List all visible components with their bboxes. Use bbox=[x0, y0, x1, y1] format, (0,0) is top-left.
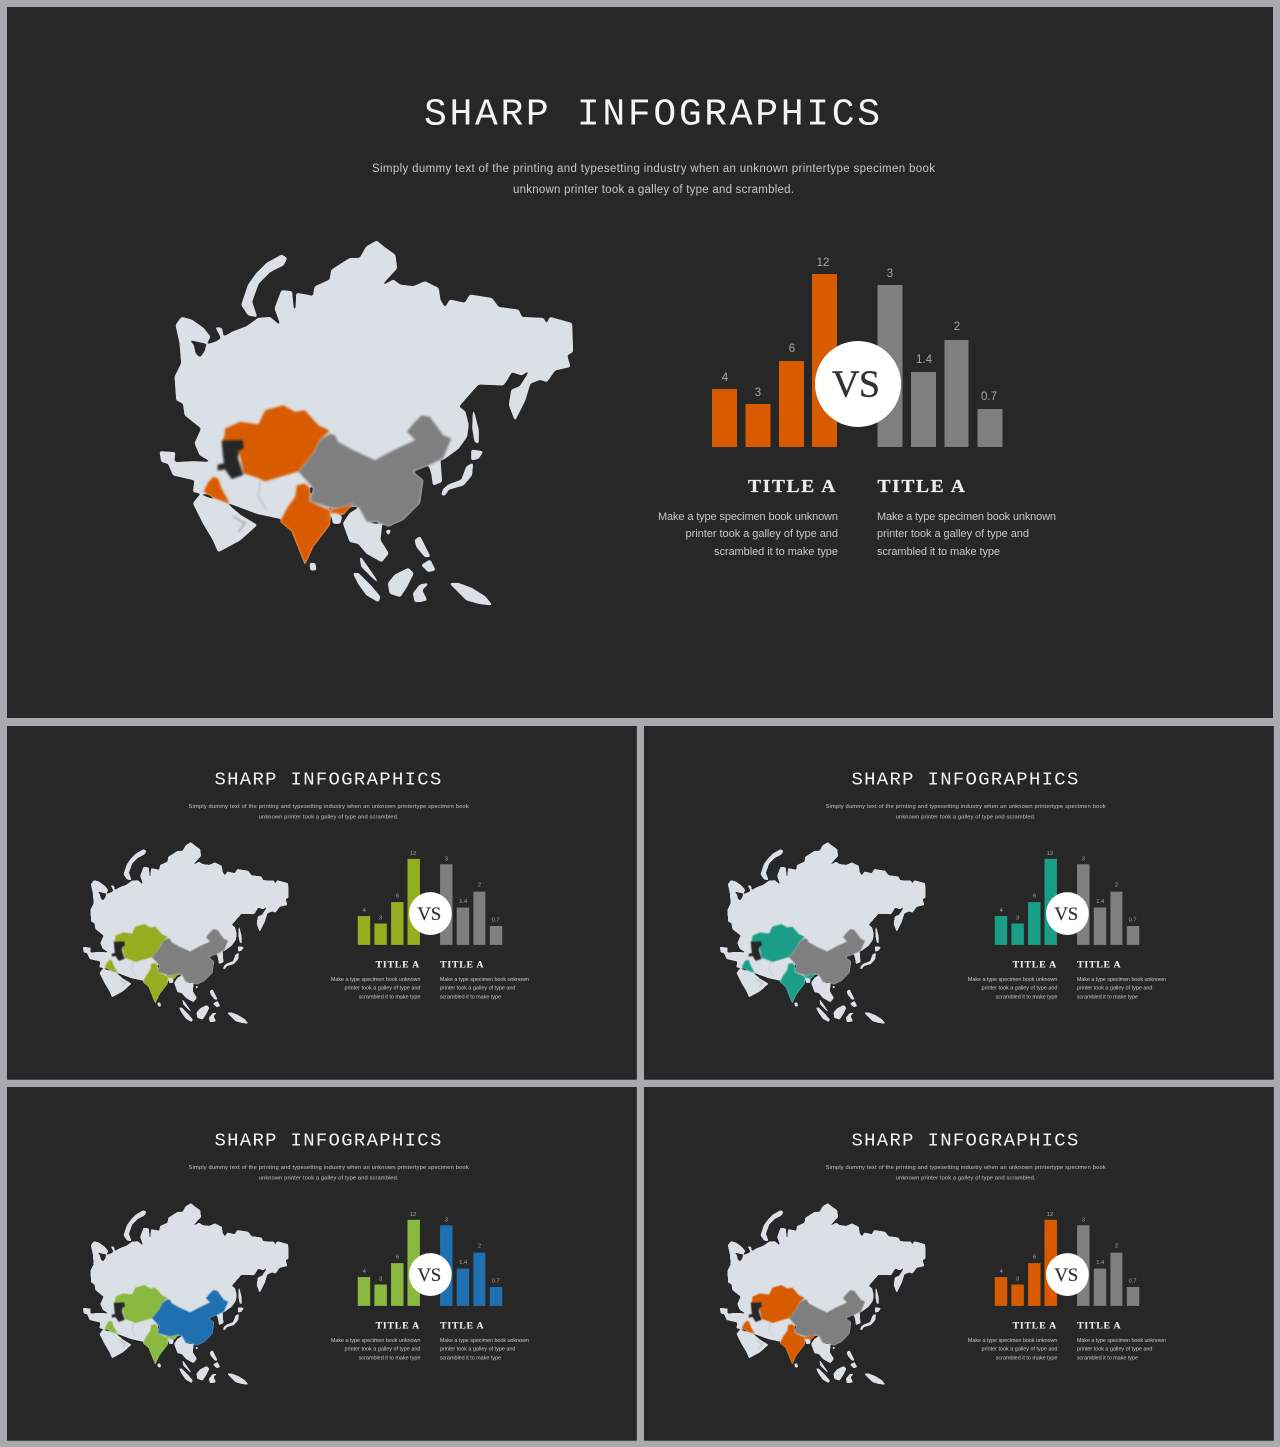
bar value labels bbox=[363, 851, 500, 924]
VS badge: VS bbox=[832, 364, 880, 406]
VS badge: VS bbox=[417, 904, 441, 925]
subtitle text: unknown printer took a galley of type and scrambled. bbox=[513, 184, 794, 196]
bar chart: left series bbox=[712, 274, 837, 447]
VS badge: VS bbox=[1054, 904, 1078, 925]
bar chart: left series bbox=[995, 1220, 1057, 1306]
bar value labels: 0.7 bbox=[492, 918, 500, 924]
left column heading: TITLE A bbox=[1013, 1320, 1057, 1330]
bar value labels: 2 bbox=[478, 883, 481, 889]
title: SHARP INFOGRAPHICS bbox=[214, 768, 441, 790]
subtitle text bbox=[189, 804, 469, 821]
bar value labels: 3 bbox=[445, 1217, 448, 1223]
panel: main slide orange bbox=[7, 7, 1273, 718]
bar value labels: 6 bbox=[1033, 1255, 1036, 1261]
VS badge bbox=[1046, 892, 1089, 935]
left column heading: TITLE A bbox=[1013, 959, 1057, 969]
right column text: scrambled it to make type bbox=[1077, 995, 1138, 1001]
bar chart: left series bbox=[358, 1220, 420, 1306]
VS badge: VS bbox=[417, 1265, 441, 1286]
bar chart: left series bbox=[995, 859, 1057, 945]
left column text: Make a type specimen book unknown bbox=[968, 1338, 1057, 1344]
VS badge bbox=[815, 341, 901, 427]
subtitle text bbox=[189, 1165, 469, 1182]
left column text: scrambled it to make type bbox=[359, 995, 420, 1001]
bar value labels: 3 bbox=[1082, 856, 1085, 862]
right column heading: TITLE A bbox=[440, 1320, 484, 1330]
bar chart: right series bbox=[878, 285, 1002, 447]
bar value labels: 3 bbox=[1016, 1277, 1019, 1283]
left column text bbox=[331, 977, 420, 1001]
left column text: printer took a galley of type and bbox=[982, 986, 1057, 992]
subtitle text: Simply dummy text of the printing and typesetting industry when an unknown printertype specimen book bbox=[189, 804, 469, 810]
bar chart: right series bbox=[440, 1225, 502, 1306]
subtitle text: Simply dummy text of the printing and typesetting industry when an unknown printertype specimen book bbox=[826, 804, 1106, 810]
map of Asia bbox=[83, 842, 288, 1024]
right column text: Make a type specimen book unknown bbox=[1077, 1338, 1166, 1344]
bar value labels: 4 bbox=[1000, 908, 1004, 914]
left column text: scrambled it to make type bbox=[714, 546, 838, 558]
bar value labels: 1.4 bbox=[916, 354, 933, 366]
left column text: Make a type specimen book unknown bbox=[968, 977, 1057, 983]
bar value labels: 6 bbox=[789, 343, 795, 355]
bar value labels: 4 bbox=[363, 1269, 367, 1275]
bar chart: left series bbox=[358, 859, 420, 945]
left column text bbox=[968, 1338, 1057, 1362]
VS badge bbox=[409, 1253, 452, 1296]
left column text bbox=[968, 977, 1057, 1001]
left column text: scrambled it to make type bbox=[996, 995, 1057, 1001]
bar value labels: 4 bbox=[722, 372, 729, 384]
bar value labels bbox=[1000, 851, 1137, 924]
right column text: Make a type specimen book unknown bbox=[877, 511, 1056, 523]
title: SHARP INFOGRAPHICS bbox=[851, 768, 1078, 790]
subtitle text bbox=[826, 1165, 1106, 1182]
bar value labels: 0.7 bbox=[1129, 918, 1137, 924]
VS badge bbox=[1046, 1253, 1089, 1296]
right column heading: TITLE A bbox=[1077, 1320, 1121, 1330]
bar value labels: 2 bbox=[478, 1244, 481, 1250]
bar value labels: 12 bbox=[410, 851, 416, 857]
bar value labels: 3 bbox=[1016, 916, 1019, 922]
left column text bbox=[658, 511, 838, 558]
bar value labels: 3 bbox=[379, 916, 382, 922]
subtitle text bbox=[372, 163, 935, 196]
bar value labels: 2 bbox=[1115, 1244, 1118, 1250]
panel: small slide teal bbox=[644, 726, 1274, 1080]
VS badge bbox=[409, 892, 452, 935]
bar value labels: 12 bbox=[1047, 1212, 1053, 1218]
right column text: printer took a galley of type and bbox=[877, 528, 1029, 540]
right column text: scrambled it to make type bbox=[440, 1356, 501, 1362]
bar value labels: 3 bbox=[379, 1277, 382, 1283]
right column heading: TITLE A bbox=[440, 959, 484, 969]
title: SHARP INFOGRAPHICS bbox=[214, 1129, 441, 1151]
bar value labels: 6 bbox=[396, 1255, 399, 1261]
right column heading: TITLE A bbox=[1077, 959, 1121, 969]
left column text: scrambled it to make type bbox=[359, 1356, 420, 1362]
right column text: printer took a galley of type and bbox=[1077, 1347, 1152, 1353]
right column text bbox=[440, 1338, 529, 1362]
bar value labels: 1.4 bbox=[1096, 1260, 1105, 1266]
bar value labels: 1.4 bbox=[459, 899, 468, 905]
bar value labels: 3 bbox=[755, 387, 761, 399]
bar value labels: 1.4 bbox=[1096, 899, 1105, 905]
subtitle text: Simply dummy text of the printing and typesetting industry when an unknown printertype specimen book bbox=[372, 163, 935, 175]
panel: small slide green and blue bbox=[7, 1087, 637, 1441]
map of Asia bbox=[720, 842, 925, 1024]
bar value labels: 2 bbox=[1115, 883, 1118, 889]
right column heading: TITLE A bbox=[878, 476, 966, 496]
right column text: scrambled it to make type bbox=[877, 546, 1000, 558]
right column text: Make a type specimen book unknown bbox=[440, 977, 529, 983]
left column text bbox=[331, 1338, 420, 1362]
left column text: Make a type specimen book unknown bbox=[658, 511, 838, 523]
map of Asia bbox=[160, 241, 573, 605]
subtitle text: Simply dummy text of the printing and typesetting industry when an unknown printertype specimen book bbox=[826, 1165, 1106, 1171]
title: SHARP INFOGRAPHICS bbox=[851, 1129, 1078, 1151]
panel: small slide olive green bbox=[7, 726, 637, 1080]
bar value labels: 12 bbox=[1047, 851, 1053, 857]
left column text: printer took a galley of type and bbox=[686, 528, 838, 540]
left column text: printer took a galley of type and bbox=[345, 986, 420, 992]
bar value labels: 4 bbox=[363, 908, 367, 914]
bar chart: right series bbox=[1077, 1225, 1139, 1306]
subtitle text: Simply dummy text of the printing and typesetting industry when an unknown printertype specimen book bbox=[189, 1165, 469, 1171]
subtitle text: unknown printer took a galley of type and scrambled. bbox=[896, 815, 1036, 821]
left column text: printer took a galley of type and bbox=[345, 1347, 420, 1353]
left column text: printer took a galley of type and bbox=[982, 1347, 1057, 1353]
bar value labels: 12 bbox=[817, 257, 829, 269]
subtitle text: unknown printer took a galley of type and scrambled. bbox=[259, 1176, 399, 1182]
bar value labels bbox=[722, 257, 997, 403]
right column text: printer took a galley of type and bbox=[440, 986, 515, 992]
left column text: scrambled it to make type bbox=[996, 1356, 1057, 1362]
right column text: scrambled it to make type bbox=[1077, 1356, 1138, 1362]
right column text: Make a type specimen book unknown bbox=[440, 1338, 529, 1344]
right column text: scrambled it to make type bbox=[440, 995, 501, 1001]
bar value labels: 2 bbox=[954, 321, 960, 333]
left column heading: TITLE A bbox=[376, 959, 420, 969]
left column text: Make a type specimen book unknown bbox=[331, 977, 420, 983]
bar value labels: 0.7 bbox=[1129, 1279, 1137, 1285]
right column text: printer took a galley of type and bbox=[440, 1347, 515, 1353]
bar value labels: 6 bbox=[396, 894, 399, 900]
bar value labels: 1.4 bbox=[459, 1260, 468, 1266]
bar value labels: 3 bbox=[887, 268, 893, 280]
bar value labels: 3 bbox=[445, 856, 448, 862]
bar value labels: 3 bbox=[1082, 1217, 1085, 1223]
bar value labels bbox=[1000, 1212, 1137, 1285]
left column heading: TITLE A bbox=[376, 1320, 420, 1330]
bar value labels: 4 bbox=[1000, 1269, 1004, 1275]
right column text: printer took a galley of type and bbox=[1077, 986, 1152, 992]
subtitle text: unknown printer took a galley of type and scrambled. bbox=[259, 815, 399, 821]
left column text: Make a type specimen book unknown bbox=[331, 1338, 420, 1344]
panel: small slide orange bbox=[644, 1087, 1274, 1441]
right column text bbox=[1077, 1338, 1166, 1362]
right column text bbox=[877, 511, 1056, 558]
right column text bbox=[440, 977, 529, 1001]
map of Asia bbox=[720, 1203, 925, 1385]
map of Asia bbox=[83, 1203, 288, 1385]
VS badge: VS bbox=[1054, 1265, 1078, 1286]
bar value labels: 0.7 bbox=[492, 1279, 500, 1285]
left column heading: TITLE A bbox=[748, 476, 837, 496]
right column text: Make a type specimen book unknown bbox=[1077, 977, 1166, 983]
bar chart: right series bbox=[1077, 864, 1139, 945]
title: SHARP INFOGRAPHICS bbox=[424, 94, 880, 136]
bar value labels: 0.7 bbox=[981, 391, 997, 403]
subtitle text: unknown printer took a galley of type and scrambled. bbox=[896, 1176, 1036, 1182]
bar value labels: 6 bbox=[1033, 894, 1036, 900]
bar value labels: 12 bbox=[410, 1212, 416, 1218]
bar chart: right series bbox=[440, 864, 502, 945]
bar value labels bbox=[363, 1212, 500, 1285]
subtitle text bbox=[826, 804, 1106, 821]
right column text bbox=[1077, 977, 1166, 1001]
